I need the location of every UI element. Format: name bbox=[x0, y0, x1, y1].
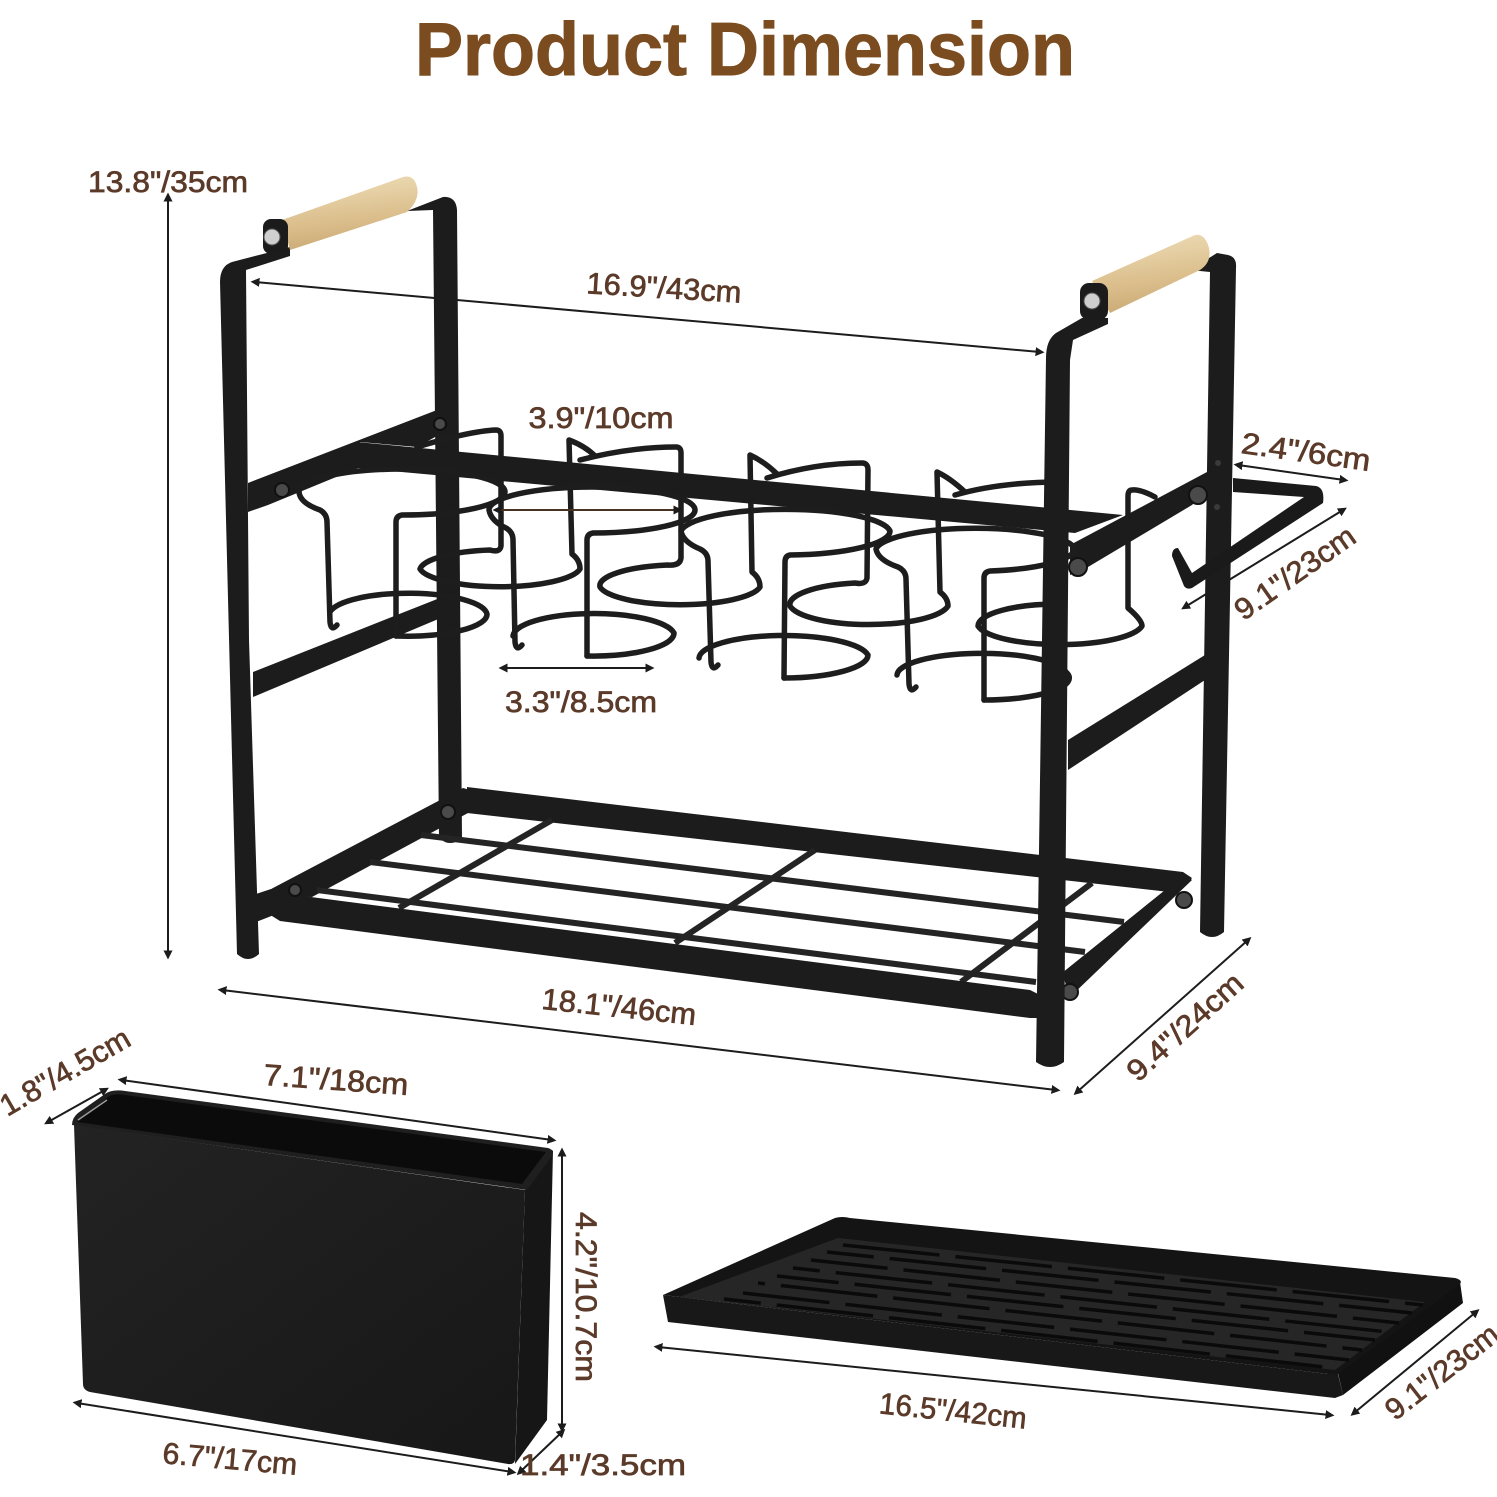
dimension labels: 3.9"/10cm bbox=[528, 402, 674, 435]
dimension labels: 2.4"/6cm bbox=[1239, 427, 1373, 478]
tray front face bbox=[663, 1295, 1343, 1398]
bin opening interior bbox=[77, 1094, 546, 1184]
rear left post bbox=[407, 197, 462, 843]
dimension labels: 9.1"/23cm bbox=[1228, 520, 1362, 627]
left handle tab and screw bbox=[263, 219, 288, 254]
tray rear wall and left lip bbox=[663, 1217, 1461, 1374]
storage bin bbox=[72, 1090, 553, 1464]
shelf frame and wires bbox=[256, 787, 1192, 1018]
top cross beam bbox=[357, 442, 1123, 533]
right side lower brace bbox=[1068, 655, 1205, 770]
shelf cross wires bbox=[399, 820, 1092, 982]
right wooden handle bbox=[1092, 235, 1210, 313]
dimension labels: 18.1"/46cm bbox=[540, 983, 698, 1032]
shelf rear band bbox=[467, 787, 1192, 893]
front row bottle holders bbox=[299, 469, 1075, 700]
title: Product Dimension bbox=[415, 7, 1075, 91]
left wooden handle bbox=[282, 176, 418, 250]
main rack illustration bbox=[220, 176, 1323, 1067]
front right post with top bracket bbox=[1036, 318, 1108, 1067]
dimension labels: 6.7"/17cm bbox=[161, 1437, 299, 1482]
bin front face bbox=[74, 1125, 525, 1464]
right side upper rail bbox=[1070, 472, 1207, 575]
dimension labels: 9.4"/24cm bbox=[1120, 967, 1250, 1088]
dimension labels: 13.8"/35cm bbox=[88, 166, 248, 199]
tray slots bbox=[724, 1245, 1423, 1368]
dimension labels: 3.3"/8.5cm bbox=[505, 686, 657, 719]
tray right side face bbox=[1338, 1282, 1463, 1395]
shelf front band bbox=[272, 888, 1038, 1018]
dimension labels: 16.9"/43cm bbox=[586, 267, 742, 310]
shelf screws bbox=[289, 805, 1192, 1000]
tray floor bbox=[679, 1238, 1425, 1370]
rear row bottle holders bbox=[417, 430, 1155, 645]
left side lower brace bbox=[253, 592, 455, 697]
side hook bbox=[1172, 478, 1323, 589]
dimension labels: 16.5"/42cm bbox=[878, 1387, 1028, 1436]
left side upper rail bbox=[248, 400, 457, 512]
shelf long wires bbox=[317, 835, 1124, 982]
bin rim bbox=[72, 1090, 553, 1190]
rail screws bbox=[275, 418, 1221, 576]
bin rim highlight bbox=[78, 1100, 107, 1120]
shelf right band bbox=[1062, 874, 1192, 997]
dimension labels: 4.2"/10.7cm bbox=[569, 1212, 602, 1382]
shelf left band bbox=[273, 788, 470, 897]
rear right post bbox=[1190, 253, 1236, 937]
dimension labels: 7.1"/18cm bbox=[262, 1059, 409, 1102]
left shelf joint bbox=[256, 888, 274, 922]
front left post with top bracket bbox=[220, 247, 290, 959]
drip tray bbox=[663, 1217, 1463, 1398]
dimension labels: 1.4"/3.5cm bbox=[520, 1449, 686, 1482]
bin side face bbox=[515, 1150, 553, 1464]
right handle tab and screw bbox=[1080, 283, 1108, 320]
